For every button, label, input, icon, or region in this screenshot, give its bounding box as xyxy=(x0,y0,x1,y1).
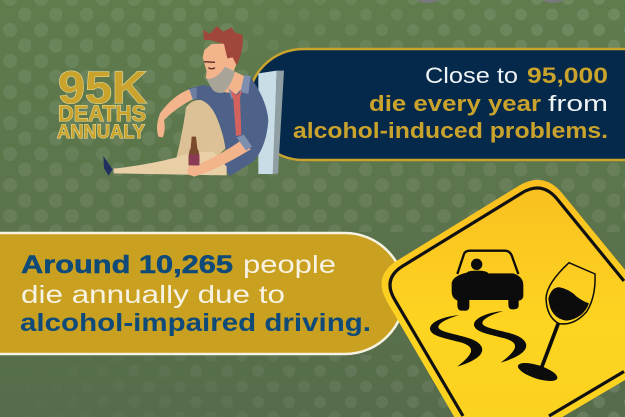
callout text: alcohol-induced problems. xyxy=(293,118,608,143)
face and hair xyxy=(203,26,243,93)
panel: 95,000 deaths callout xyxy=(248,49,625,160)
driving text: die annually due to xyxy=(21,281,285,309)
icon: beer bottle xyxy=(189,137,199,165)
callout text xyxy=(293,63,608,143)
driving text xyxy=(20,251,371,337)
stat: 95K deaths annually: 95K xyxy=(58,62,148,113)
stat: 95K deaths annually xyxy=(57,62,148,143)
icon: wine glass xyxy=(516,263,595,385)
panel: 10,265 driving deaths callout xyxy=(0,233,405,354)
driving text: alcohol-impaired driving. xyxy=(20,309,371,337)
stat: 95K deaths annually: DEATHS xyxy=(58,101,146,126)
callout text: die every year xyxy=(369,91,542,116)
callout text: 95,000 xyxy=(527,63,608,88)
driving text: people xyxy=(243,251,336,279)
icon: skid marks xyxy=(430,311,526,367)
illustration: man sitting with bottle xyxy=(103,26,284,177)
callout text: from xyxy=(548,91,608,116)
stat: 95K deaths annually: ANNUALY xyxy=(57,122,145,143)
icon: car xyxy=(452,251,523,311)
driving text: Around 10,265 xyxy=(21,251,233,279)
icon: yellow warning road sign xyxy=(382,180,625,417)
callout text: Close to xyxy=(425,63,518,88)
